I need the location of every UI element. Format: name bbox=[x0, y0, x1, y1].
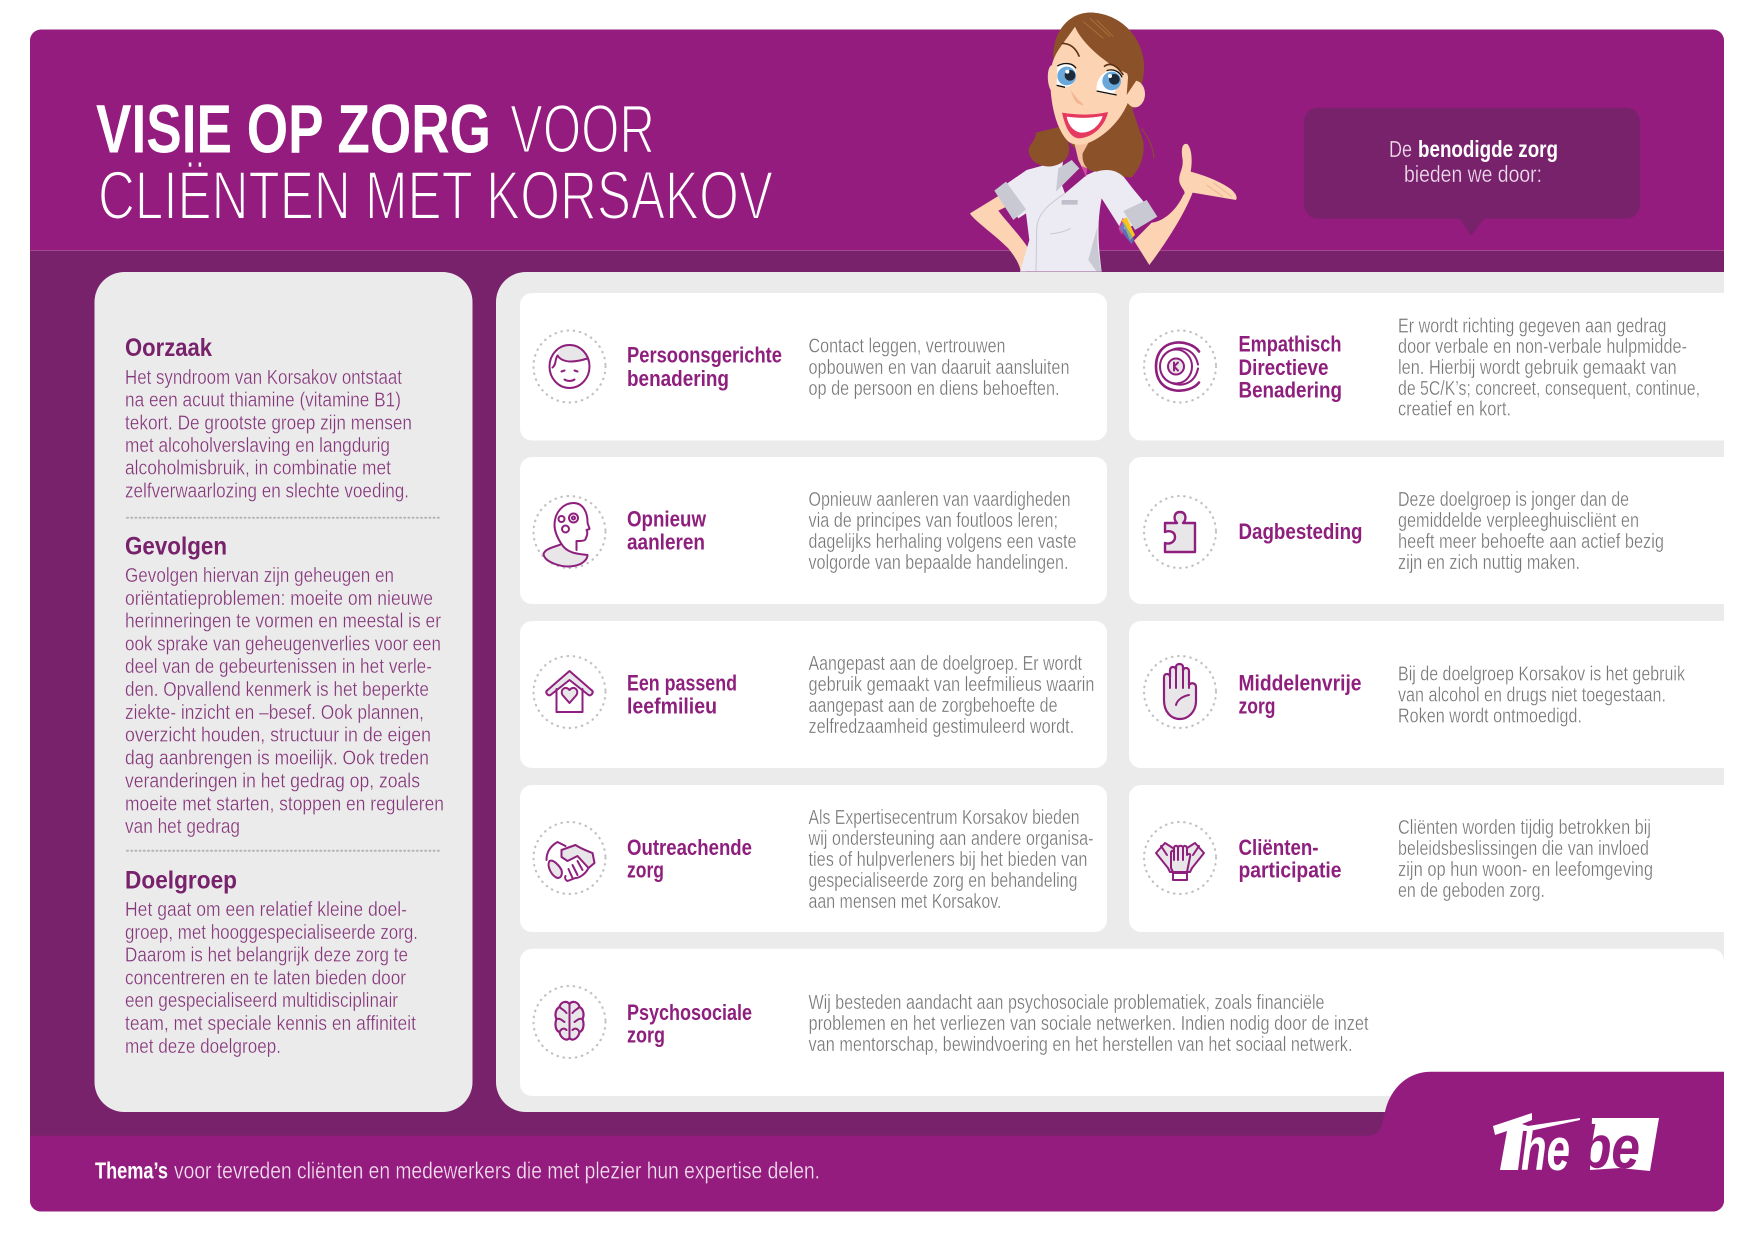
section: Oorzaak: zelfverwaarlozing en slechte voeding. bbox=[125, 479, 409, 502]
card: Opnieuw aanleren: via de principes van foutloos leren; bbox=[808, 510, 1058, 532]
title: CLIËNTEN MET KORSAKOV bbox=[98, 157, 773, 234]
card: Psychosociale zorg: zorg bbox=[627, 1023, 665, 1048]
card: Opnieuw aanleren: Opnieuw aanleren van vaardigheden bbox=[808, 489, 1070, 511]
card: Middelenvrije zorg: Middelenvrije bbox=[1238, 671, 1362, 696]
card: Dagbesteding: Dagbesteding bbox=[1238, 519, 1362, 544]
card: Middelenvrije zorg: van alcohol en drugs niet toegestaan. bbox=[1398, 685, 1666, 707]
section: Gevolgen: dag aanbrengen is moeilijk. Ook treden bbox=[125, 746, 429, 769]
card: Een passend leefmilieu: Een passend bbox=[627, 671, 737, 696]
icon: puzzle piece bbox=[1144, 496, 1216, 568]
card: Empathisch Directieve Benadering: Er wordt richting gegeven aan gedrag bbox=[1398, 315, 1666, 337]
right arm and hand bbox=[1134, 144, 1237, 265]
logo: Thebe: be bbox=[1580, 1114, 1640, 1181]
footer tagline: voor tevreden cliënten en medewerkers die met plezier hun expertise delen. bbox=[174, 1158, 820, 1184]
card: Empathisch Directieve Benadering bbox=[1129, 293, 1724, 440]
icon: concentric K circles bbox=[1144, 330, 1216, 402]
footer band with logo tab bbox=[30, 1072, 1724, 1212]
card: Persoonsgerichte benadering: benadering bbox=[627, 366, 729, 391]
card: Cliëntenparticipatie: Cliënten- bbox=[1238, 835, 1318, 860]
card: Psychosociale zorg: van mentorschap, bewindvoering en het herstellen van het sociaal netwerk. bbox=[808, 1034, 1352, 1056]
section: Oorzaak bbox=[125, 334, 412, 502]
card: Empathisch Directieve Benadering: door verbale en non-verbale hulpmidde- bbox=[1398, 336, 1687, 358]
section: Gevolgen: ook sprake van geheugenverlies voor een bbox=[125, 632, 441, 655]
card: Outreachende zorg: gespecialiseerde zorg en behandeling bbox=[808, 870, 1078, 892]
card: Dagbesteding: gemiddelde verpleeghuiscliënt en bbox=[1398, 510, 1639, 532]
card: Outreachende zorg: wij ondersteuning aan andere organisa- bbox=[808, 828, 1094, 850]
section: Oorzaak: Oorzaak bbox=[125, 334, 212, 362]
card: Outreachende zorg: Outreachende bbox=[627, 835, 752, 860]
card: Dagbesteding: heeft meer behoefte aan actief bezig bbox=[1398, 531, 1664, 553]
card: Empathisch Directieve Benadering: Benadering bbox=[1238, 378, 1342, 403]
card: Een passend leefmilieu: aangepast aan de zorgbehoefte de bbox=[808, 695, 1058, 717]
card: Dagbesteding: zijn en zich nuttig maken. bbox=[1398, 552, 1580, 574]
nose bbox=[1071, 90, 1083, 105]
card: Outreachende zorg bbox=[520, 785, 1107, 932]
card: Persoonsgerichte benadering bbox=[520, 293, 1107, 440]
card: Cliëntenparticipatie: en de geboden zorg. bbox=[1398, 880, 1545, 902]
card: Persoonsgerichte benadering: opbouwen en van daaruit aansluiten bbox=[808, 357, 1070, 379]
uniform bbox=[1000, 160, 1156, 272]
card: Opnieuw aanleren: aanleren bbox=[627, 529, 705, 554]
title: VISIE OP ZORG bbox=[96, 90, 491, 168]
section: Oorzaak: na een acuut thiamine (vitamine B1) bbox=[125, 389, 401, 412]
card: Een passend leefmilieu: Aangepast aan de doelgroep. Er wordt bbox=[808, 653, 1082, 675]
section: Doelgroep bbox=[125, 867, 418, 1058]
section: Gevolgen: Gevolgen bbox=[125, 533, 227, 561]
section: Gevolgen: ziekte- inzicht en –besef. Ook plannen, bbox=[125, 701, 424, 724]
card: Outreachende zorg: aan mensen met Korsakov. bbox=[808, 891, 1002, 913]
icon: brain bbox=[534, 986, 606, 1058]
card: Opnieuw aanleren: volgorde van bepaalde handelingen. bbox=[808, 552, 1068, 574]
card: Een passend leefmilieu: gebruik gemaakt van leefmilieus waarin bbox=[808, 674, 1094, 696]
card: Cliëntenparticipatie: participatie bbox=[1238, 858, 1342, 883]
section: Oorzaak: tekort. De grootste groep zijn mensen bbox=[125, 411, 412, 434]
card: Dagbesteding bbox=[1129, 457, 1724, 604]
card: Outreachende zorg: ties of hulpverleners bij het bieden van bbox=[808, 849, 1088, 871]
card: Middelenvrije zorg: zorg bbox=[1238, 693, 1276, 718]
section: Doelgroep: met deze doelgroep. bbox=[125, 1035, 281, 1058]
dark content band bbox=[30, 250, 1724, 1136]
section: Gevolgen: veranderingen in het gedrag op, zoals bbox=[125, 770, 420, 793]
section: Gevolgen: overzicht houden, structuur in de eigen bbox=[125, 724, 431, 747]
icon: house with heart bbox=[534, 656, 606, 728]
section: Doelgroep: Het gaat om een relatief kleine doel- bbox=[125, 898, 407, 921]
section: Oorzaak: alcoholmisbruik, in combinatie met bbox=[125, 457, 391, 480]
logo: Thebe: he bbox=[1521, 1116, 1570, 1183]
section: Doelgroep: Daarom is het belangrijk deze zorg te bbox=[125, 944, 408, 967]
card: Psychosociale zorg: problemen en het verliezen van sociale netwerken. Indien nodig door de inzet bbox=[808, 1013, 1369, 1035]
section: Doelgroep: team, met speciale kennis en affiniteit bbox=[125, 1012, 416, 1035]
card: Opnieuw aanleren: Opnieuw bbox=[627, 507, 707, 532]
card: Persoonsgerichte benadering: op de persoon en diens behoeften. bbox=[808, 378, 1060, 400]
speech bubble bbox=[1304, 108, 1640, 236]
footer tagline: Thema’s bbox=[95, 1158, 168, 1184]
card: Middelenvrije zorg bbox=[1129, 621, 1724, 768]
card: Cliëntenparticipatie: beleidsbeslissingen die van invloed bbox=[1398, 838, 1649, 860]
card: Empathisch Directieve Benadering: len. Hierbij wordt gebruik gemaakt van bbox=[1398, 357, 1677, 379]
section: Gevolgen: van het gedrag bbox=[125, 815, 240, 838]
fringe bbox=[1054, 13, 1143, 95]
section: Doelgroep: Doelgroep bbox=[125, 867, 237, 895]
panel: left information column bbox=[94, 272, 472, 1112]
section: Doelgroep: een gespecialiseerd multidisciplinair bbox=[125, 989, 398, 1012]
neck bbox=[1074, 133, 1097, 172]
section: Doelgroep: groep, met hooggespecialiseerde zorg. bbox=[125, 921, 418, 944]
icon: head with gears bbox=[534, 496, 606, 568]
lanyard bbox=[1082, 166, 1087, 177]
card: Persoonsgerichte benadering: Persoonsgerichte bbox=[627, 343, 782, 368]
speech bubble: De bbox=[1389, 136, 1412, 162]
icon: face bbox=[534, 330, 606, 402]
left arm bbox=[970, 196, 1028, 272]
card: Cliëntenparticipatie bbox=[1129, 785, 1724, 932]
rainbow armband bbox=[1118, 218, 1127, 235]
section: Gevolgen: oriëntatieproblemen: moeite om nieuwe bbox=[125, 587, 433, 610]
card: Dagbesteding: Deze doelgroep is jonger dan de bbox=[1398, 489, 1629, 511]
icon: stacked hands bbox=[1144, 822, 1216, 894]
card: Outreachende zorg: zorg bbox=[627, 858, 664, 883]
icon: raised hand bbox=[1144, 656, 1216, 728]
card: Cliëntenparticipatie: zijn op hun woon- en leefomgeving bbox=[1398, 859, 1653, 881]
card: Middelenvrije zorg: Bij de doelgroep Korsakov is het gebruik bbox=[1398, 664, 1686, 686]
card: Psychosociale zorg: Psychosociale bbox=[627, 1000, 752, 1025]
section: Gevolgen: moeite met starten, stoppen en reguleren bbox=[125, 792, 444, 815]
illustration: nurse character bbox=[970, 13, 1237, 272]
card: Empathisch Directieve Benadering: Empathisch bbox=[1238, 332, 1342, 357]
section: Doelgroep: concentreren en te laten bieden door bbox=[125, 966, 406, 989]
panel: right care approaches bbox=[496, 272, 1724, 1112]
eyebrows bbox=[1062, 43, 1123, 75]
title bbox=[96, 90, 773, 234]
card: Opnieuw aanleren bbox=[520, 457, 1107, 604]
card: Cliëntenparticipatie: Cliënten worden tijdig betrokken bij bbox=[1398, 817, 1651, 839]
mouth bbox=[1062, 112, 1108, 138]
section: Gevolgen: Gevolgen hiervan zijn geheugen en bbox=[125, 564, 394, 587]
card: Middelenvrije zorg: Roken wordt ontmoedigd. bbox=[1398, 706, 1582, 728]
title: VOOR bbox=[510, 90, 655, 168]
front hair right side bbox=[1083, 110, 1144, 177]
section: Gevolgen bbox=[125, 533, 444, 838]
card: Een passend leefmilieu: zelfredzaamheid gestimuleerd wordt. bbox=[808, 716, 1074, 738]
icon: handshake bbox=[534, 822, 606, 894]
card: Psychosociale zorg: Wij besteden aandacht aan psychosociale problematiek, zoals financiële bbox=[808, 992, 1324, 1014]
card: Empathisch Directieve Benadering: Directieve bbox=[1238, 355, 1328, 380]
card: Outreachende zorg: Als Expertisecentrum Korsakov bieden bbox=[808, 807, 1080, 829]
back hair bbox=[1053, 13, 1144, 160]
card: Een passend leefmilieu: leefmilieu bbox=[627, 693, 717, 718]
front hair left flip bbox=[1029, 127, 1069, 166]
section: Gevolgen: den. Opvallend kenmerk is het beperkte bbox=[125, 678, 429, 701]
section: Oorzaak: Het syndroom van Korsakov ontstaat bbox=[125, 366, 402, 389]
card: Empathisch Directieve Benadering: creatief en kort. bbox=[1398, 398, 1511, 420]
card: Psychosociale zorg bbox=[520, 949, 1724, 1096]
logo: Thebe bbox=[1493, 1113, 1659, 1183]
ear bbox=[1125, 81, 1145, 107]
section: Gevolgen: deel van de gebeurtenissen in het verle- bbox=[125, 655, 432, 678]
section: Oorzaak: met alcoholverslaving en langdurig bbox=[125, 434, 390, 457]
card: Een passend leefmilieu bbox=[520, 621, 1107, 768]
section: Gevolgen: herinneringen te vormen en meestal is er bbox=[125, 610, 441, 633]
speech bubble: benodigde zorg bbox=[1418, 136, 1558, 162]
card: Opnieuw aanleren: dagelijks herhaling volgens een vaste bbox=[808, 531, 1076, 553]
speech bubble: bieden we door: bbox=[1404, 161, 1542, 187]
card: Persoonsgerichte benadering: Contact leggen, vertrouwen bbox=[808, 336, 1006, 358]
face bbox=[1048, 27, 1132, 145]
eyes bbox=[1057, 64, 1076, 87]
